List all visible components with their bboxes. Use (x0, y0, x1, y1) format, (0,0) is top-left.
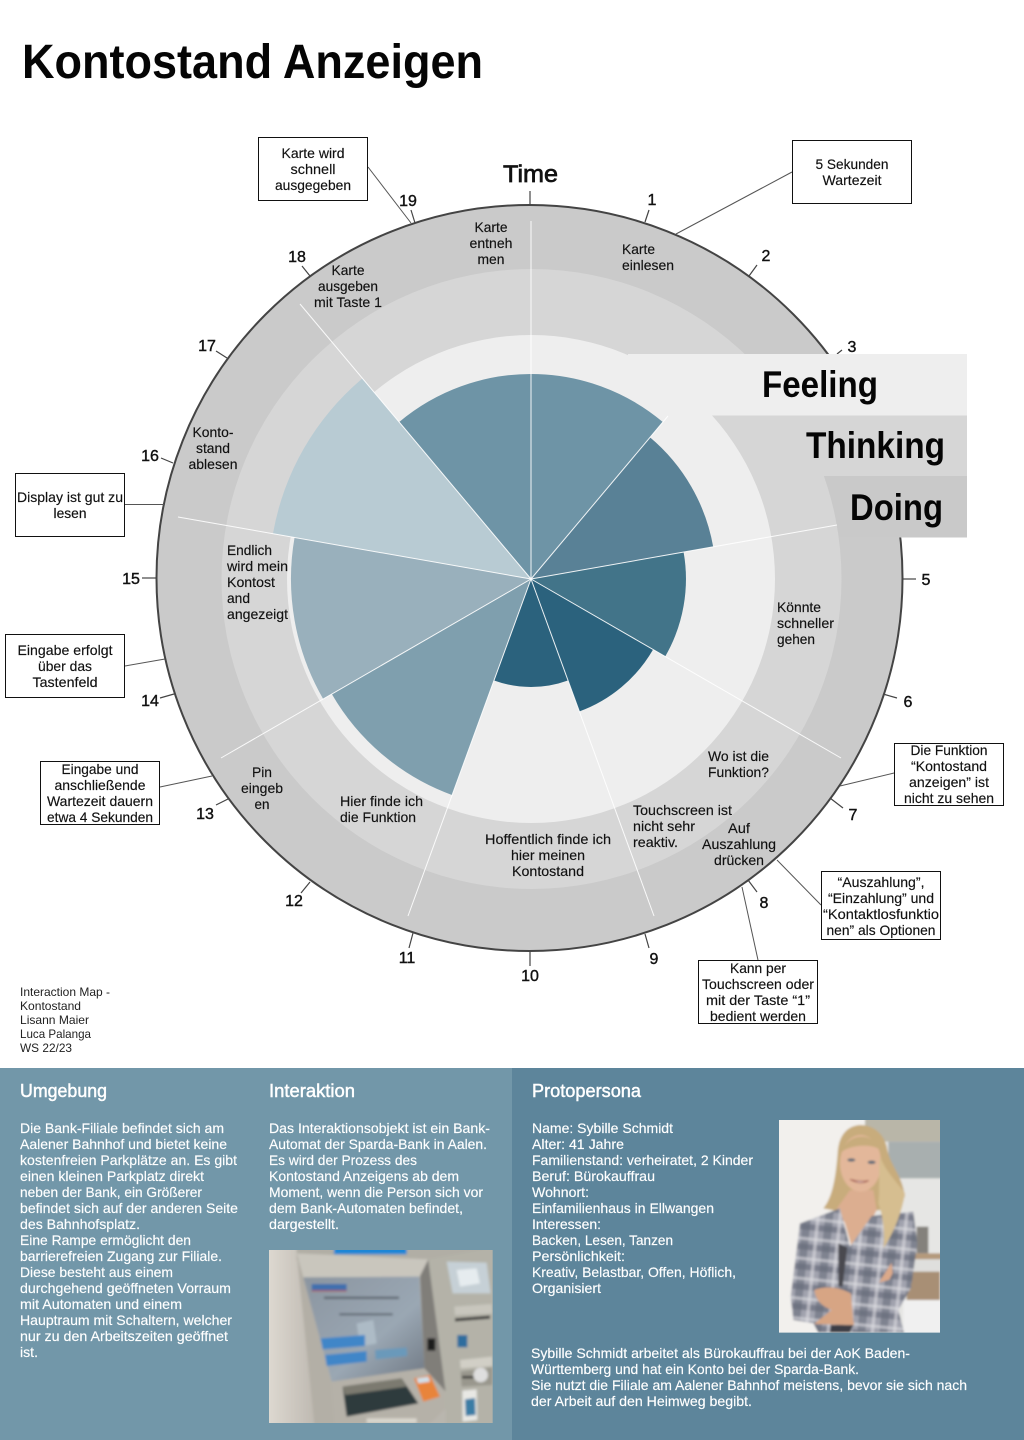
time numbers (122, 192, 931, 985)
credits (20, 985, 110, 1055)
text: Umgebung: Hauptraum mit Schaltern, welcher (20, 1312, 232, 1328)
time numbers: 17 (198, 338, 216, 355)
text: Umgebung: Die Bank-Filiale befindet sich am (20, 1120, 224, 1136)
label: feeling: Feeling (762, 364, 878, 405)
time numbers: 13 (196, 806, 214, 823)
step text: Pin eingeben (241, 764, 283, 812)
time numbers: 15 (122, 571, 140, 588)
step text: Touchscreen: reaktiv. (633, 834, 678, 850)
text: Umgebung: befindet sich auf der anderen Seite (20, 1200, 238, 1216)
step text: Karte ausgeben: Karte (332, 262, 365, 278)
time numbers: 7 (849, 807, 858, 824)
text: persona facts: Alter: 41 Jahre (532, 1136, 624, 1152)
text: Umgebung: barrierefreien Zugang zur Filiale. (20, 1248, 222, 1264)
interaction wheel chart (122, 161, 967, 985)
text: Umgebung (20, 1120, 238, 1360)
step text: Hier finde ich die Funktion: Hier finde ich (340, 793, 423, 809)
panel: Protopersona (512, 1068, 1024, 1440)
time numbers: 6 (904, 694, 913, 711)
step text: Karte einlesen: einlesen (622, 257, 674, 273)
time ticks (142, 191, 916, 966)
callout: Display ist gut zu lesen: lesen (54, 505, 86, 521)
text: persona facts: Einfamilienhaus in Ellwangen (532, 1200, 714, 1216)
credits: WS 22/23 (20, 1041, 72, 1055)
step text: Auf Auszahlung druecken: drücken (714, 852, 764, 868)
step text: Pin eingeben: eingeb (241, 780, 283, 796)
text: persona facts: Persönlichkeit: (532, 1248, 625, 1264)
step text: Auf Auszahlung druecken: Auf (728, 820, 750, 836)
thinking band (650, 416, 967, 476)
time numbers: 18 (288, 249, 306, 266)
callout: 5 Sekunden Wartezeit: 5 Sekunden (816, 156, 888, 172)
step text: Touchscreen: nicht sehr (633, 818, 695, 834)
text: Interaktion (269, 1120, 490, 1232)
callout: Eingabe erfolgt ueber das Tastenfeld: Tastenfeld (32, 674, 98, 690)
text: Umgebung: durchgehend geöffneten Vorraum (20, 1280, 231, 1296)
text: persona facts: Name: Sybille Schmidt (532, 1120, 673, 1136)
step text: Touchscreen (633, 802, 732, 850)
callout: Eingabe und Wartezeit (40, 761, 212, 825)
callout: Touchscreen oder Taste: bedient werden (710, 1008, 806, 1024)
step spokes (178, 221, 841, 916)
doing ring (156, 205, 902, 951)
text: persona facts: Organisiert (532, 1280, 601, 1296)
step text: Kontostand ablesen: stand (196, 440, 230, 456)
step text: Koennte schneller gehen: schneller (777, 615, 834, 631)
callout: Auszahlung Einzahlung Optionen (777, 860, 940, 940)
step text: Karte entnehmen (470, 219, 512, 267)
callout: Funktion nicht zu sehen (840, 742, 1004, 806)
step text: Karte einlesen (622, 241, 674, 273)
step text: Touchscreen: Touchscreen ist (633, 802, 732, 818)
callout: Touchscreen oder Taste (698, 887, 818, 1024)
time numbers: 5 (922, 572, 931, 589)
step text: Koennte schneller gehen: Könnte (777, 599, 821, 615)
photo: bank ATM (269, 1250, 493, 1423)
step text: Auf Auszahlung druecken: Auszahlung (702, 836, 776, 852)
text: Interaktion: Moment, wenn die Person sich vor (269, 1184, 483, 1200)
time numbers: 8 (760, 895, 769, 912)
label: doing: Doing (850, 487, 943, 528)
callout: Touchscreen oder Taste: Touchscreen oder (702, 976, 814, 992)
callout: Karte wird schnell ausgegeben (258, 138, 411, 223)
step text: Hier finde ich die Funktion (340, 793, 423, 825)
text: Umgebung: des Bahnhofsplatz. (20, 1216, 140, 1232)
text: Umgebung: kostenfreien Parkplätze an. Es gibt (20, 1152, 237, 1168)
callout: Eingabe und Wartezeit: Eingabe und (62, 761, 138, 777)
time numbers: 1 (648, 192, 657, 209)
callout: Display ist gut zu lesen: Display ist gut zu (17, 489, 123, 505)
callout: Auszahlung Einzahlung Optionen: “Einzahlung” und (828, 890, 934, 906)
feeling ring (287, 335, 775, 823)
time numbers: 2 (762, 248, 771, 265)
step text: Endlich wird mein Kontostand angezeigt: angezeigt (227, 606, 288, 622)
title: Kontostand Anzeigen (22, 36, 483, 89)
text: persona facts: Wohnort: (532, 1184, 589, 1200)
feeling band (628, 354, 967, 416)
text: persona description (531, 1345, 967, 1409)
step text: Endlich wird mein Kontostand angezeigt: Kontost (227, 574, 275, 590)
time numbers: 11 (399, 950, 415, 967)
step text: Pin eingeben: Pin (252, 764, 272, 780)
time numbers: 12 (285, 893, 303, 910)
credits: Kontostand (20, 999, 81, 1013)
step text: Pin eingeben: en (254, 796, 270, 812)
text: Umgebung: einen kleinen Parkplatz direkt (20, 1168, 204, 1184)
text: persona description: Württemberg und hat ein Konto bei der Sparda-Bank. (531, 1361, 859, 1377)
thinking ring (222, 269, 842, 889)
text: persona facts: Kreativ, Belastbar, Offen, Höflich, (532, 1264, 736, 1280)
callout: Eingabe erfolgt ueber das Tastenfeld: Eingabe erfolgt (18, 642, 113, 658)
step text: Karte einlesen: Karte (622, 241, 655, 257)
time numbers: 9 (650, 951, 659, 968)
text: Umgebung: Aalener Bahnhof und bietet keine (20, 1136, 227, 1152)
text: persona facts: Familienstand: verheiratet, 2 Kinder (532, 1152, 753, 1168)
callout: Touchscreen oder Taste: mit der Taste “1” (706, 992, 810, 1008)
text: persona facts: Beruf: Bürokauffrau (532, 1168, 655, 1184)
callout: Funktion nicht zu sehen: “Kontostand (911, 758, 987, 774)
text: Umgebung: ist. (20, 1344, 38, 1360)
callout: Karte wird schnell ausgegeben: ausgegeben (275, 177, 351, 193)
step text: Hoffentlich finde ich hier meinen Kontostand: hier meinen (511, 847, 585, 863)
text: Umgebung: neben der Bank, ein Größerer (20, 1184, 202, 1200)
text: persona facts (532, 1120, 753, 1296)
callout: Eingabe und Wartezeit: anschließende (54, 777, 146, 793)
text: Umgebung: mit Automaten und einem (20, 1296, 182, 1312)
step text: Karte entnehmen: men (478, 251, 504, 267)
callout: Eingabe und Wartezeit: Wartezeit dauern (47, 793, 153, 809)
text: Umgebung: Diese besteht aus einem (20, 1264, 173, 1280)
callout: Karte wird schnell ausgegeben: schnell (290, 161, 336, 177)
callout: Auszahlung Einzahlung Optionen: nen” als Optionen (826, 922, 936, 938)
text: persona facts: Interessen: (532, 1216, 601, 1232)
time numbers: 3 (848, 339, 857, 356)
text: Interaktion: dargestellt. (269, 1216, 339, 1232)
credits: Lisann Maier (20, 1013, 89, 1027)
doing band (760, 476, 967, 538)
callout: Display ist gut zu lesen (16, 474, 165, 536)
callout: Funktion nicht zu sehen: nicht zu sehen (904, 790, 994, 806)
callout: 5 Sekunden Wartezeit: Wartezeit (822, 172, 882, 188)
text: persona description: Sybille Schmidt arbeitet als Bürokauffrau bei der AoK Baden- (531, 1345, 910, 1361)
text: Interaktion: dem Bank-Automaten befindet, (269, 1200, 463, 1216)
feeling wedges (273, 374, 713, 795)
callout: Karte wird schnell ausgegeben: Karte wird (282, 145, 344, 161)
text: Umgebung: Eine Rampe ermöglicht den (20, 1232, 191, 1248)
step text: Hoffentlich finde ich hier meinen Kontostand: Kontostand (512, 863, 584, 879)
credits: Interaction Map - (20, 985, 110, 999)
step text: Hoffentlich finde ich hier meinen Kontostand (485, 831, 611, 879)
panel: Umgebung and Interaktion (0, 1068, 512, 1440)
step text: Endlich wird mein Kontostand angezeigt: wird mein (226, 558, 288, 574)
step text: Wo ist die Funktion: Wo ist die (708, 748, 769, 764)
text: Interaktion: Automat der Sparda-Bank in Aalen. (269, 1136, 487, 1152)
heading: Protopersona: Protopersona (532, 1081, 642, 1101)
time numbers: 10 (521, 968, 539, 985)
heading: Umgebung: Umgebung (20, 1081, 107, 1101)
text: persona facts: Backen, Lesen, Tanzen (532, 1232, 673, 1248)
step text: Wo ist die Funktion (708, 748, 769, 780)
text: Umgebung: nur zu den Arbeitszeiten geöffnet (20, 1328, 228, 1344)
step text: Koennte schneller gehen: gehen (777, 631, 815, 647)
step text: Kontostand ablesen: ablesen (188, 456, 238, 472)
step text: Karte ausgeben: ausgeben (318, 278, 378, 294)
text: Interaktion: Kontostand Anzeigens ab dem (269, 1168, 459, 1184)
callout: Funktion nicht zu sehen: anzeigen” ist (909, 774, 989, 790)
callout: 5 Sekunden Wartezeit (676, 140, 912, 234)
callout: Eingabe und Wartezeit: etwa 4 Sekunden (47, 809, 153, 825)
text: persona description: Sie nutzt die Filiale am Aalener Bahnhof meistens, bevor sie sich nach (531, 1377, 967, 1393)
text: Interaktion: Es wird der Prozess des (269, 1152, 417, 1168)
heading: Interaktion: Interaktion (269, 1081, 355, 1101)
step text: Endlich wird mein Kontostand angezeigt (226, 542, 288, 622)
credits: Luca Palanga (20, 1027, 91, 1041)
step text: Karte entnehmen: Karte (474, 219, 508, 235)
step text: Auf Auszahlung druecken (702, 820, 776, 868)
callout: Touchscreen oder Taste: Kann per (730, 960, 786, 976)
step text: Kontostand ablesen (188, 424, 238, 472)
step text: Hoffentlich finde ich hier meinen Kontostand: Hoffentlich finde ich (485, 831, 611, 847)
callout: Auszahlung Einzahlung Optionen: “Kontaktlosfunktio (823, 906, 939, 922)
photo: persona portrait (777, 1117, 943, 1337)
step text: Endlich wird mein Kontostand angezeigt: and (227, 590, 250, 606)
step text: Karte ausgeben (314, 262, 382, 310)
step text: Karte entnehmen: entneh (470, 235, 512, 251)
step text: Kontostand ablesen: Konto- (192, 424, 234, 440)
step text: Endlich wird mein Kontostand angezeigt: Endlich (227, 542, 272, 558)
text: Interaktion: Das Interaktionsobjekt ist ein Bank- (269, 1120, 490, 1136)
step text: Hier finde ich die Funktion: die Funktion (340, 809, 416, 825)
callout: Eingabe erfolgt ueber das Tastenfeld: über das (38, 658, 92, 674)
time numbers: 19 (399, 193, 417, 210)
axis label: time: Time (503, 161, 558, 188)
callout: Funktion nicht zu sehen: Die Funktion (910, 742, 988, 758)
time numbers: 14 (141, 693, 159, 710)
step text: Koennte schneller gehen (777, 599, 834, 647)
step text: Karte ausgeben: mit Taste 1 (314, 294, 382, 310)
text: persona description: der Arbeit auf den Heimweg begibt. (531, 1393, 752, 1409)
label: thinking: Thinking (806, 425, 945, 466)
step text: Wo ist die Funktion: Funktion? (708, 764, 769, 780)
time numbers: 16 (141, 448, 159, 465)
callout: Auszahlung Einzahlung Optionen: “Auszahlung”, (838, 874, 924, 890)
callout: Eingabe erfolgt ueber das Tastenfeld (6, 634, 165, 698)
